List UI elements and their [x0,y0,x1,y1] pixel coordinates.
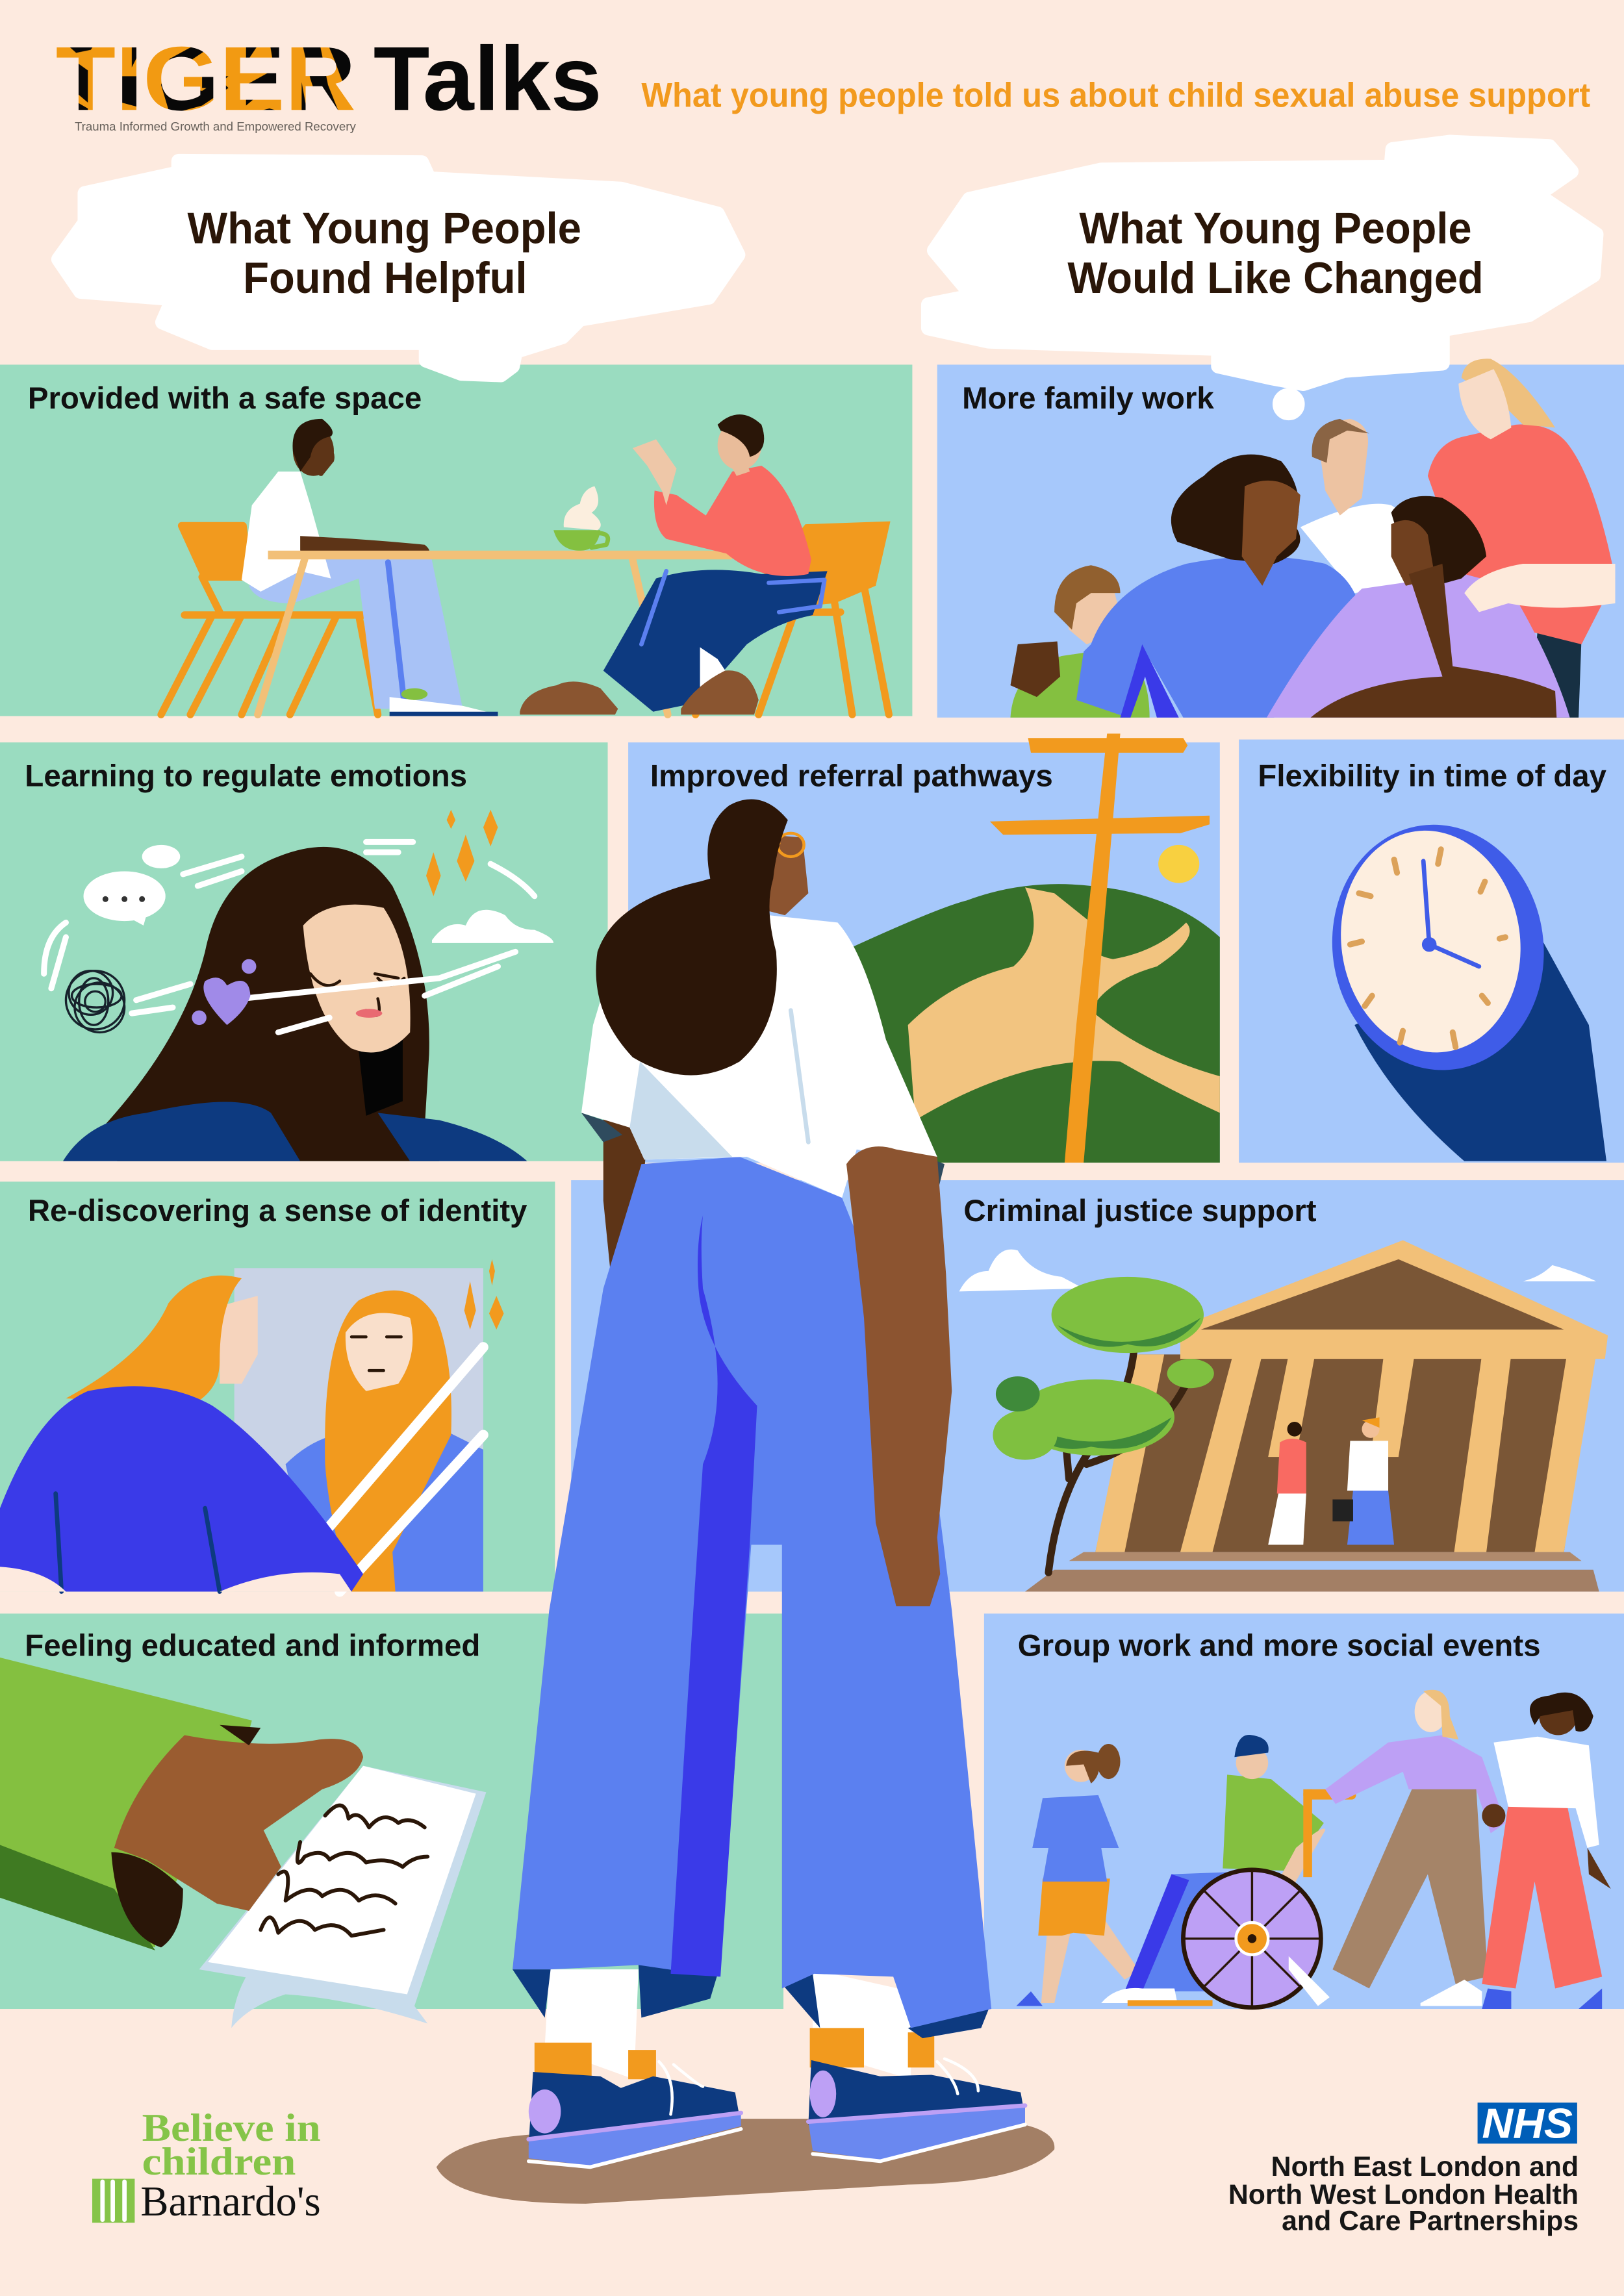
right shoe [808,2028,1025,2161]
scene: regulating emotions [25,759,553,1161]
panel label: Learning to regulate emotions [25,759,467,794]
hill [842,884,1220,1163]
scene: group of friends [1016,1629,1611,2009]
left chair [161,525,378,714]
panel: safe space background [0,364,912,716]
girl walking [1016,1744,1139,2006]
scene: clock [1258,759,1607,1161]
logo: Believe in children: children [142,2140,296,2184]
panel label: More family work [962,381,1214,416]
clouds [959,1250,1596,1291]
tick marks [1350,850,1505,1047]
panel: flexibility background [1239,740,1624,1163]
logo tagline: Trauma Informed Growth and Empowered Recovery [75,120,356,133]
tree [993,1277,1214,1572]
NHS partnership text: and Care Partnerships [1282,2205,1579,2236]
right sock [813,1969,911,2079]
heading: would like changed: Would Like Changed [1067,254,1484,303]
neck [359,1025,403,1116]
NHS partnership text: North West London Health [1228,2179,1579,2210]
scene: hand and note [0,1629,486,2028]
panel label: Group work and more social events [1018,1629,1541,1663]
paths [908,887,1220,1120]
panel label: Criminal justice support [963,1194,1317,1228]
lilac top girl [1267,496,1615,718]
speech bubbles [83,845,180,926]
blonde woman [1289,1690,1505,2006]
panel: identity background [0,1181,555,1592]
wheel [1183,1870,1321,2008]
logo: Believe in children: Believe in [142,2106,321,2150]
paper [199,1766,486,2006]
heart [203,978,250,1025]
clock face [1326,819,1534,1064]
cloud: would like changed [928,142,1596,413]
sparkles [426,810,498,896]
pediment inner [1201,1259,1564,1330]
hand [114,1735,363,1911]
trouser cuffs [513,1965,990,2038]
panel: referral pathways background [628,742,1220,1163]
green sleeve [0,1658,252,1947]
hair [596,799,788,1075]
sun [1158,845,1199,883]
trousers [513,1157,991,2028]
signpost [990,734,1210,1163]
panel label: Re-discovering a sense of identity [28,1194,527,1228]
tangled scribble [66,971,125,1032]
left arm behind [603,1116,647,1289]
left shoe [529,2043,741,2167]
blue top woman [1076,455,1362,718]
dark sleeve opening [111,1725,260,1947]
panel label: Feeling educated and informed [25,1629,480,1663]
right arm [846,1146,952,1606]
red top woman [1428,359,1615,644]
heading: found helpful: Found Helpful [243,254,527,303]
navy legs [1530,629,1582,718]
left person [242,419,498,716]
shirt [581,893,945,1198]
small hearts [192,959,256,1025]
shoulders [63,1102,527,1161]
trouser deep blue fold [670,1215,757,1976]
panel: group work background [984,1613,1624,2009]
handwriting [260,1806,427,1936]
heading: would like changed: What Young People [1079,204,1472,253]
sparkles [464,1259,503,1330]
scene: mirror and identity [0,1194,527,1592]
title: TIGER Talks: Talks [374,27,602,129]
steps [1025,1552,1599,1592]
white motion streaks [44,842,535,1032]
logo: Believe in children [142,2106,321,2184]
cloud: found helpful [58,161,738,375]
panel label: Provided with a safe space [28,381,422,416]
sleeve shadow [0,1845,155,1950]
building wall [1095,1354,1593,1552]
mirror [235,1268,483,1592]
NHS partnership text [1228,2151,1579,2236]
clock rim [1317,811,1560,1084]
panel: regulate emotions background [0,742,608,1161]
columns [1095,1354,1596,1552]
scene: signpost and pathways [650,734,1220,1163]
mirror glints [307,1347,483,1592]
right person [520,414,891,714]
panel label: Flexibility in time of day [1258,759,1607,794]
child [1010,565,1150,718]
scene: family group [962,359,1615,718]
title: TIGER Talks: TIGER [56,27,356,129]
cloud [432,910,553,943]
paper under sheet [231,1962,427,2028]
heading: found helpful [188,204,581,303]
panel: criminal justice background [571,1180,1624,1592]
logo: NHS: NHS [1482,2099,1573,2147]
clock hands [1423,861,1479,966]
subtitle: What young people told us about child sexual abuse support [641,77,1590,115]
central figure [437,799,1054,2204]
ground shadow [437,2119,1054,2204]
clock shadow [1354,937,1606,1161]
heading: found helpful: What Young People [188,204,581,253]
NHS partnership text: North East London and [1271,2151,1579,2182]
scene: court building [959,1194,1608,1592]
front woman [0,1276,363,1592]
panel label: Improved referral pathways [650,759,1053,794]
man [1300,419,1429,593]
glasses [761,833,804,857]
wheelchair user [1101,1735,1356,2006]
pediment [1180,1241,1608,1359]
cup and steam [553,486,608,551]
reflection [286,1291,483,1592]
heading: would like changed [1067,204,1484,303]
face [303,905,411,1053]
woman in red trousers [1482,1693,1611,2009]
scene: two people at a table [28,381,891,716]
head [767,835,808,915]
panel: educated background [0,1613,783,2009]
hijab [103,847,439,1161]
table [258,551,732,714]
left sock [545,1969,639,2079]
panel: family work background [937,364,1624,718]
two people [1268,1417,1394,1545]
title: TIGER Talks [56,27,602,129]
logo: Barnardo's: Barnardo's [140,2178,321,2225]
